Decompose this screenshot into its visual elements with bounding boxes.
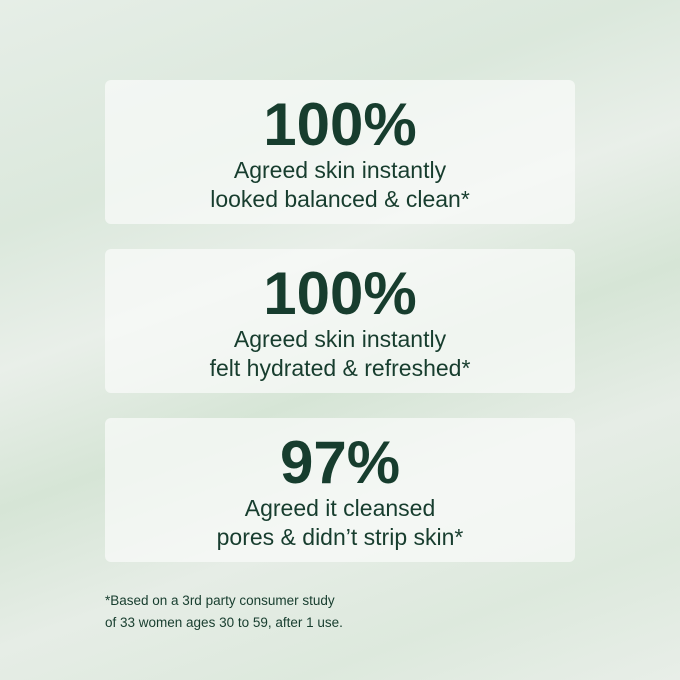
footnote: *Based on a 3rd party consumer study [105,593,335,608]
stat number: 97% [280,429,400,496]
stat description [210,157,470,212]
footnote [105,593,343,630]
stat description: looked balanced & clean* [210,186,470,212]
stat description: Agreed it cleansed [245,495,435,521]
stat number: 100% [263,260,417,327]
stat description [217,495,463,550]
stat description [210,326,470,381]
stat description: pores & didn’t strip skin* [217,524,463,550]
card: 100% balanced [105,80,575,224]
footnote: of 33 women ages 30 to 59, after 1 use. [105,615,343,630]
stat number: 100% [263,91,417,158]
card: 100% hydrated [105,249,575,393]
stat description: Agreed skin instantly [234,326,446,352]
card: 97% cleansed [105,418,575,562]
stat description: felt hydrated & refreshed* [210,355,470,381]
stat description: Agreed skin instantly [234,157,446,183]
